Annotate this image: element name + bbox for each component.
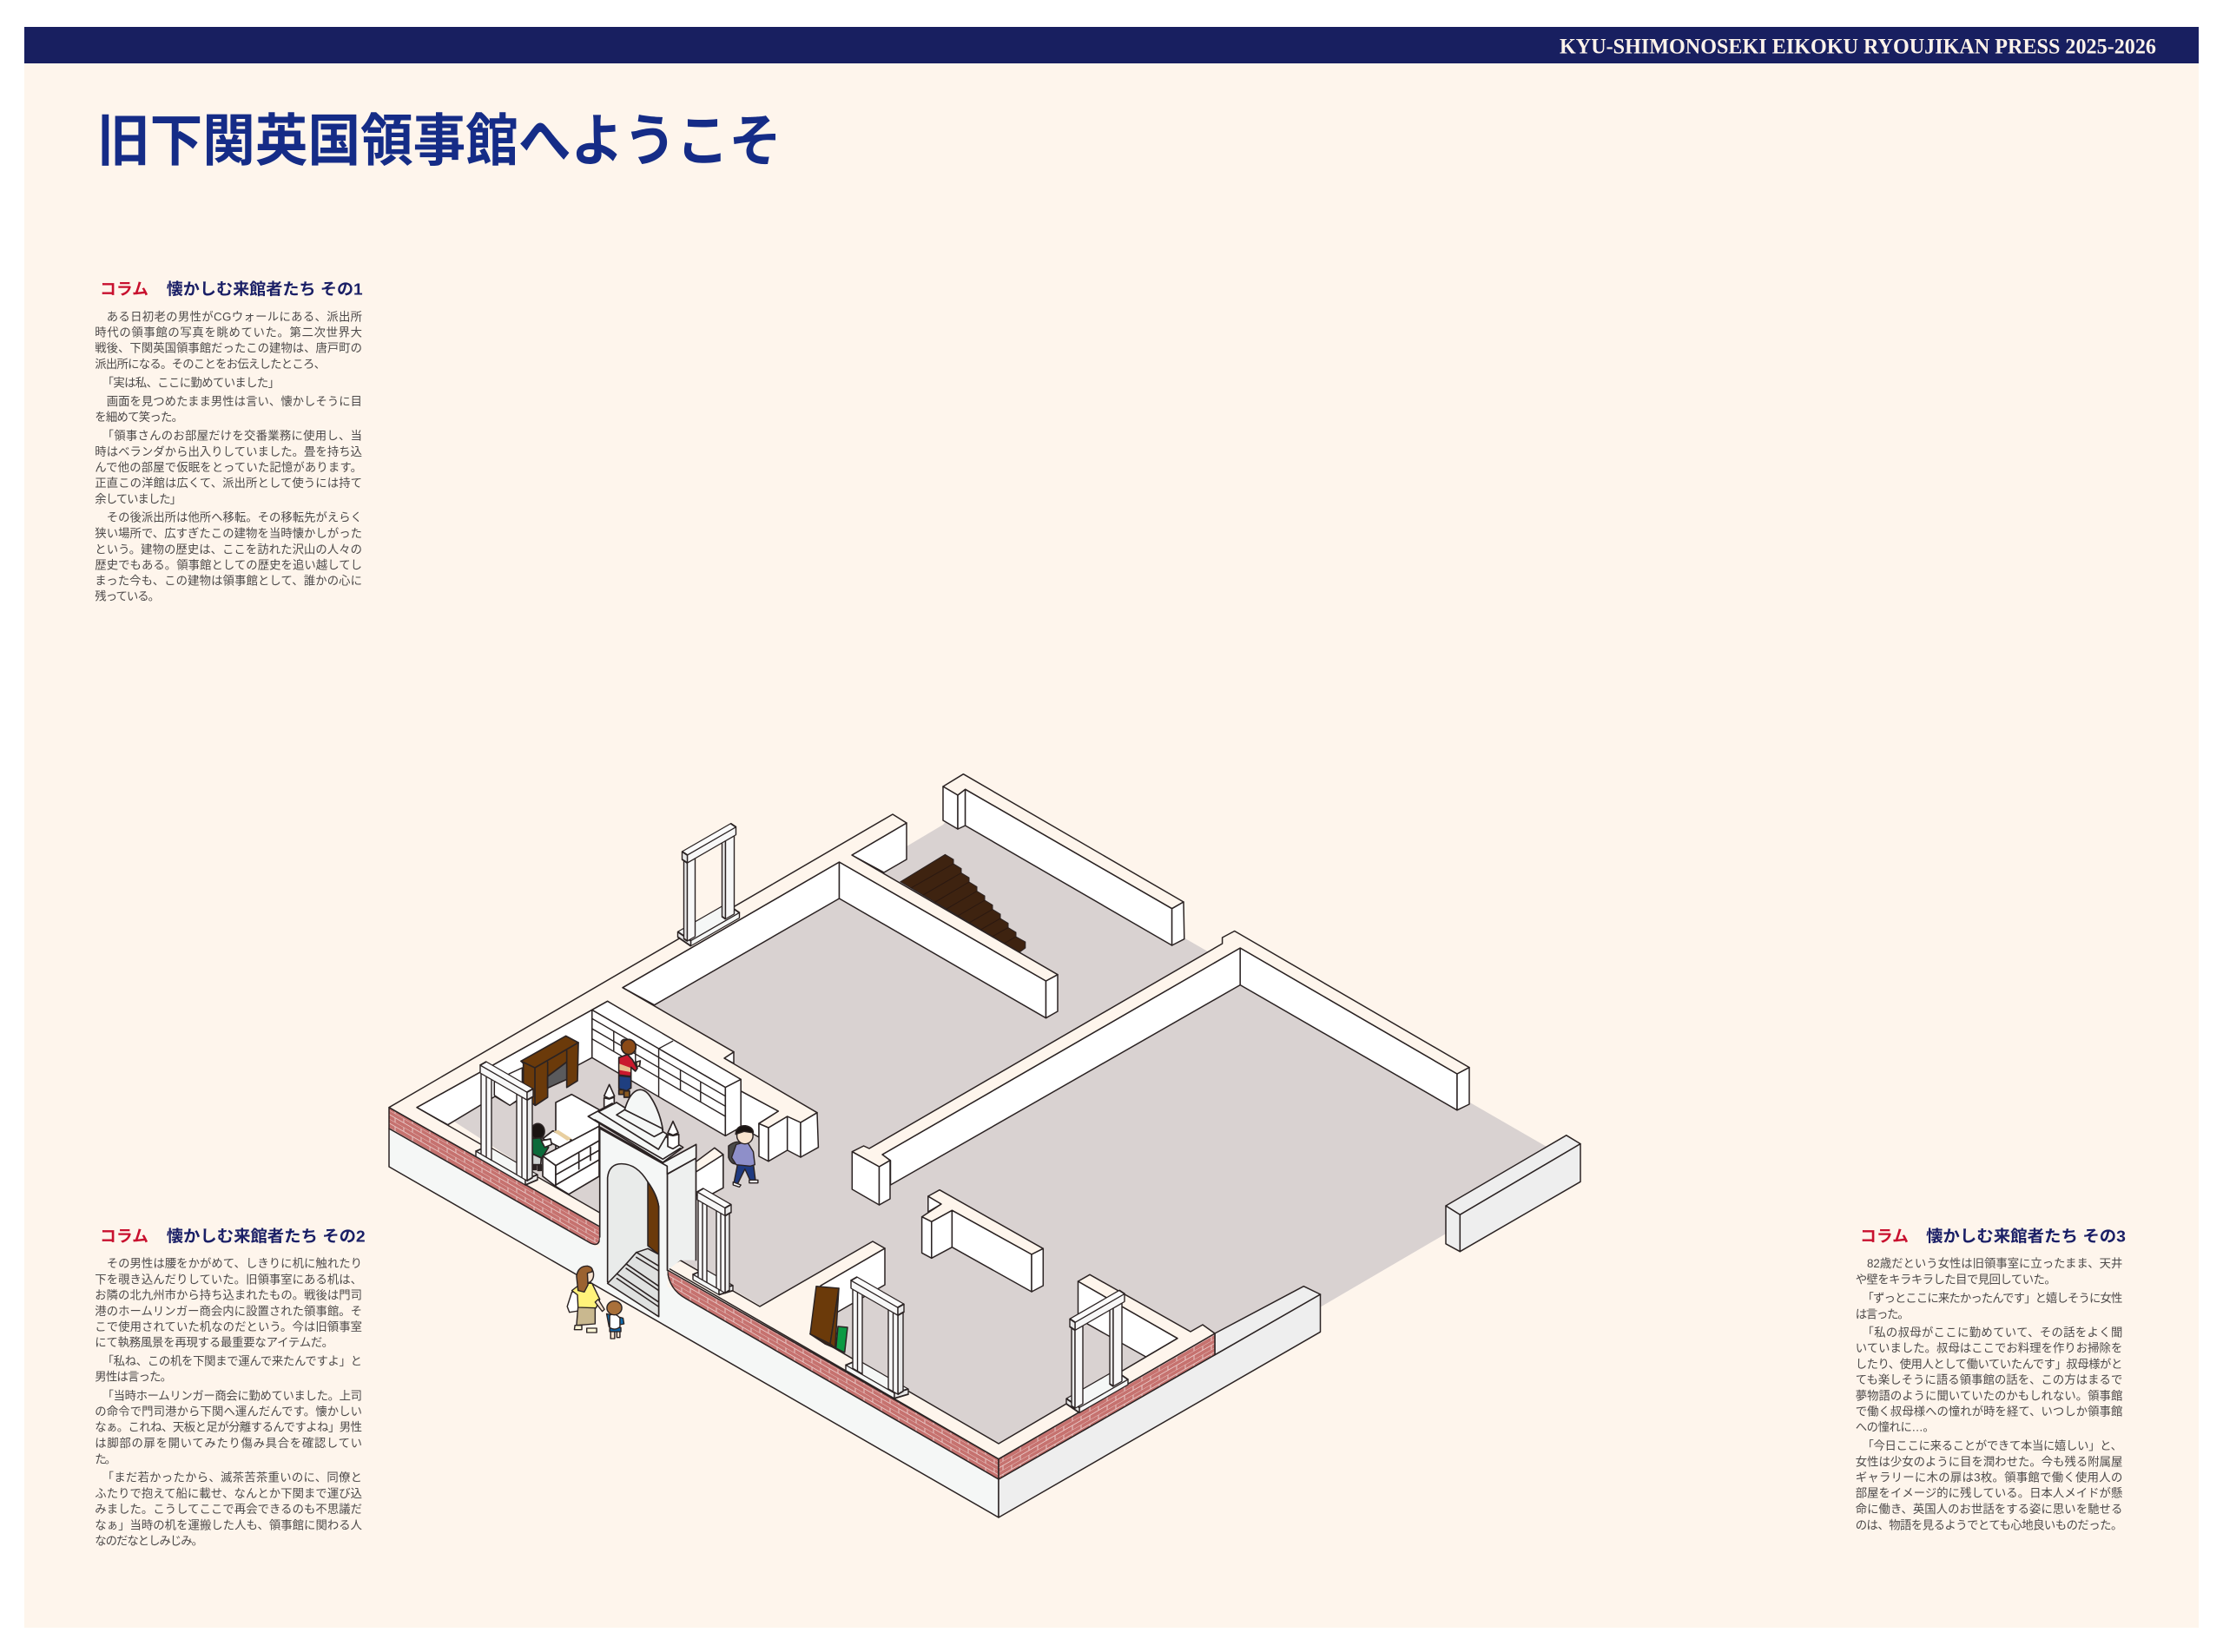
column 1 body text: 「実は私、ここに勤めていました」 — [102, 377, 280, 390]
arched doorway — [608, 1164, 659, 1317]
column 1 body text — [95, 310, 362, 603]
column 2 body text: お隣の北九州市から持ち込まれたもの。戦後は門司 — [95, 1289, 362, 1302]
title: 旧下関英国領事館へようこそ — [97, 109, 782, 172]
column 1 body text: という。建物の歴史は、ここを訪れた沢山の人々の — [95, 543, 362, 556]
column 1 — [95, 280, 363, 603]
chimney block — [494, 1068, 522, 1105]
column 3 body text: 夢物語のように聞いていたのかもしれない。領事館 — [1856, 1389, 2122, 1402]
right finial — [668, 1122, 679, 1149]
low bookcase — [543, 1126, 599, 1195]
column 2 body text: 「当時ホームリンガー商会に勤めていました。上司 — [102, 1389, 362, 1402]
column 1 body text: まった今も、この建物は領事館として、誰かの心に — [95, 575, 362, 588]
column 1 body text: 「領事さんのお部屋だけを交番業務に使用し、当 — [102, 429, 362, 443]
column 2 body text: なぁ。これね、天板と足が分離するんですよね」男性 — [95, 1421, 362, 1434]
column 1 body text: 歴史でもある。領事館としての歴史を追い越してし — [95, 558, 362, 571]
column 3 body text: ても楽しそうに語る領事館の話を、この方はまるで — [1856, 1373, 2122, 1386]
column 2 body text: その男性は腰をかがめて、しきりに机に触れたり — [107, 1257, 362, 1270]
shelving and chimney — [494, 1001, 741, 1135]
column 1 body text: 余していました」 — [95, 492, 181, 505]
fireplace — [521, 1036, 578, 1105]
column 2 body text — [95, 1257, 362, 1547]
column 2 body text: ふたりで抱えて船に載せ、なんとか下関まで運び込 — [95, 1487, 362, 1500]
column 2 body text: なのだなとしみじみ。 — [95, 1534, 203, 1547]
column 2 body text: みました。こうしてここで再会できるのも不思議だ — [95, 1503, 362, 1516]
column 3 body text: で働く叔母様への憧れが時を経て、いつしか領事館 — [1856, 1405, 2122, 1418]
left finial — [604, 1084, 615, 1110]
front-right window — [1066, 1286, 1128, 1420]
column 1 body text: 正直この洋館は広くて、派出所として使うには持て — [95, 476, 362, 490]
column 2 — [95, 1227, 366, 1547]
column 3 body text: ギャラリーに木の扉は3枚。領事館で働く使用人の — [1856, 1471, 2122, 1484]
column 3 body text: 命に働き、英国人のお世話をする姿に思いを馳せる — [1856, 1502, 2122, 1516]
central long wall — [852, 931, 1469, 1205]
column 1 body text: 時はベランダから出入りしていました。畳を持ち込 — [95, 445, 362, 458]
column 3 body text: 女性は少女のように目を潤わせた。今も残る附属屋 — [1856, 1455, 2122, 1468]
column 1 body text: 派出所になる。そのことをお伝えしたところ、 — [95, 358, 326, 371]
column 1 body text: を細めて笑った。 — [95, 411, 183, 424]
gate faces — [600, 1127, 696, 1317]
shelving unit — [592, 1001, 741, 1135]
column 3 — [1856, 1227, 2126, 1531]
column 1 body text: 画面を見つめたまま男性は言い、懐かしそうに目 — [107, 395, 362, 408]
column 1 body text: んで他の部屋で仮眠をとっていた記憶があります。 — [95, 461, 362, 474]
header bar — [24, 27, 2199, 63]
column 3 body text: は言った。 — [1856, 1307, 1910, 1320]
right free-standing block — [1446, 1135, 1580, 1252]
column 1 body text: ある日初老の男性がCGウォールにある、派出所 — [107, 310, 362, 323]
lower-front window — [846, 1271, 908, 1406]
column 1 body text: 時代の領事館の写真を眺めていた。第二次世界大 — [95, 326, 362, 339]
column 3 body text: 部屋をイメージ的に残している。日本人メイドが懸 — [1856, 1487, 2122, 1500]
entrance steps — [608, 1248, 659, 1317]
floor — [452, 812, 1571, 1444]
column 3 body text: したり、使用人として働いていたんです」叔母様がと — [1856, 1357, 2122, 1371]
rear window — [677, 819, 740, 953]
gate cap — [600, 1127, 696, 1174]
column 1 body text: 狭い場所で、広すぎたこの建物を当時懐かしがった — [95, 527, 362, 540]
column 2 body text: こで使用されていた机なのだという。今は旧領事室 — [95, 1320, 362, 1333]
T-shaped wall — [922, 1190, 1043, 1292]
entrance room furniture — [521, 1036, 640, 1195]
column 2 body text: 「まだ若かったから、滅茶苦茶重いのに、同僚と — [102, 1471, 362, 1484]
man with backpack — [729, 1126, 758, 1187]
front-left window — [476, 1056, 538, 1192]
column 3 body text — [1856, 1257, 2122, 1531]
column 1 heading: コラム — [100, 280, 148, 299]
rear wall — [943, 774, 1184, 945]
column 3 body text: 「今日ここに来ることができて本当に嬉しい」と、 — [1862, 1439, 2122, 1452]
column 2 body text: 港のホームリンガー商会内に設置された領事館。そ — [95, 1305, 362, 1318]
column 3 heading: 懐かしむ来館者たち その3 — [1926, 1227, 2126, 1245]
column 1 body text: その後派出所は他所へ移転。その移転先がえらく — [107, 511, 362, 524]
woman at desk — [531, 1123, 551, 1170]
top tier — [617, 1109, 663, 1136]
child — [607, 1301, 624, 1339]
column 2 heading: コラム — [100, 1227, 148, 1245]
desk — [543, 1130, 571, 1149]
counter — [556, 1095, 599, 1151]
column 3 body text: 「ずっとここに来たかったんです」と嬉しそうに女性 — [1862, 1292, 2122, 1305]
pediment arch — [624, 1089, 663, 1130]
column 2 body text: た。 — [95, 1452, 116, 1465]
header bar: KYU-SHIMONOSEKI EIKOKU RYOUJIKAN PRESS 2025-2026 — [1560, 35, 2156, 59]
front-right ledge and small room walls — [667, 1241, 1215, 1459]
column 3 body text: 「私の叔母がここに勤めていて、その話をよく聞 — [1862, 1326, 2122, 1339]
column 2 heading: 懐かしむ来館者たち その2 — [167, 1227, 366, 1245]
back-left walls and ledge — [389, 814, 1058, 1227]
pediment base — [588, 1103, 683, 1162]
visitors — [567, 1126, 758, 1339]
column 1 body text: 戦後、下関英国領事館だったこの建物は、唐戸町の — [95, 341, 362, 355]
gate side block — [696, 1148, 723, 1195]
staircase — [900, 854, 1026, 952]
column 3 heading: コラム — [1860, 1227, 1909, 1245]
gate-right window — [693, 1182, 733, 1303]
woman at shelves — [619, 1039, 640, 1097]
column 2 body text: 下を覗き込んだりしていた。旧領事室にある机は、 — [95, 1273, 362, 1286]
column 1 body text: 残っている。 — [95, 590, 160, 603]
column 2 body text: 「私ね、この机を下関まで運んで来たんですよ」と — [102, 1355, 362, 1368]
gate porch and stairs — [600, 1127, 723, 1317]
pediment tier — [598, 1102, 667, 1149]
gate roof — [588, 1084, 696, 1174]
column 3 body text: への憧れに…。 — [1856, 1421, 1935, 1434]
column 2 body text: にて執務風景を再現する最重要なアイテムだ。 — [95, 1336, 333, 1349]
column 2 body text: なぁ」当時の机を運搬した人も、領事館に関わる人 — [95, 1518, 362, 1531]
brick band — [389, 1108, 1215, 1479]
column 2 body text: は脚部の扉を開いてみたり傷み具合を確認してい — [95, 1436, 362, 1450]
column 3 body text: 82歳だという女性は旧領事室に立ったまま、天井 — [1867, 1257, 2122, 1270]
foundation — [389, 1129, 1320, 1517]
isometric floor plan — [389, 774, 1580, 1517]
column 3 body text: や壁をキラキラした目で見回していた。 — [1856, 1273, 2056, 1286]
column 2 body text: の命令で門司港から下関へ運んだんです。懐かしい — [95, 1405, 362, 1418]
leaning door and green board — [810, 1287, 848, 1353]
column 3 body text: のは、物語を見るようでとても心地良いものだった。 — [1856, 1518, 2122, 1531]
column 1 heading: 懐かしむ来館者たち その1 — [167, 280, 363, 299]
column 2 body text: 男性は言った。 — [95, 1371, 172, 1384]
column 3 body text: いていました。叔母はここでお料理を作りお掃除を — [1856, 1342, 2122, 1355]
woman in yellow — [567, 1266, 604, 1333]
